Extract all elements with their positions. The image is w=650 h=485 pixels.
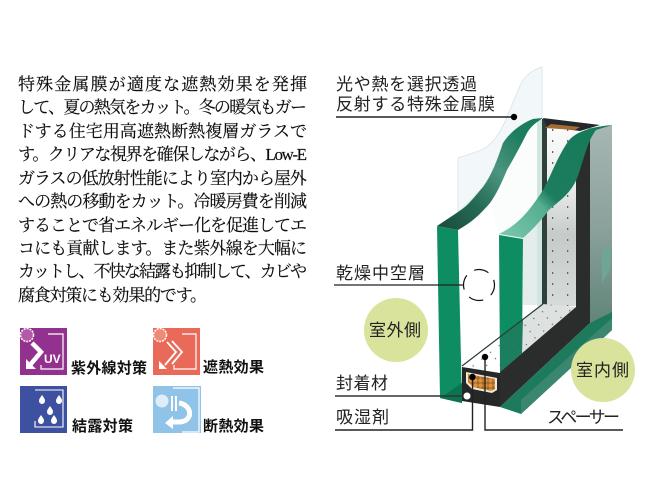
label: special metal film <box>336 75 495 114</box>
label: heat shielding: 遮熱効果 <box>203 358 264 376</box>
label: desiccant: 吸湿剤 <box>336 408 389 427</box>
pointer: desiccant <box>335 374 476 430</box>
pointer: special metal film <box>336 114 517 120</box>
dotted spacer face <box>547 128 576 306</box>
floor seen through inner pane <box>500 320 523 372</box>
icon: thermal insulation <box>153 386 201 433</box>
badge: outdoor side: 室外側 <box>369 321 421 340</box>
body text: コにも貢献します。また紫外線を大幅に <box>18 239 307 258</box>
body text: カットし、不快な結露も抑制して、カビや <box>18 261 307 281</box>
icon: UV protection: UV <box>44 352 61 366</box>
body text: 特殊金属膜が適度な遮熱効果を発揮 <box>18 75 307 94</box>
outer pane front <box>437 226 462 403</box>
badge: outdoor side <box>364 298 428 362</box>
label: UV protection: 紫外線対策 <box>71 359 147 377</box>
right side panel <box>590 125 612 330</box>
upper thin glass sheet <box>458 67 542 212</box>
body text: す。クリアな視界を確保しながら、Low-E <box>18 145 307 164</box>
label: thermal insulation: 断熱効果 <box>203 417 264 435</box>
glass diagram <box>437 67 612 414</box>
body text: ドする住宅用高遮熱断熱複層ガラスで <box>18 122 307 141</box>
body text: することで省エネルギー化を促進してエ <box>18 216 307 235</box>
inner pane curved top <box>499 125 612 238</box>
body text: への熱の移動をカット。冷暖房費を削減 <box>18 192 307 211</box>
spacer front <box>462 367 500 407</box>
body text: して、夏の熱気をカット。冬の暖気もガー <box>18 98 307 117</box>
badge: indoor side: 室内側 <box>576 361 629 380</box>
body text: ガラスの低放射性能により室内から屋外 <box>18 169 307 188</box>
desiccant <box>466 372 497 393</box>
pointer: spacer <box>482 354 623 430</box>
label: sealant: 封着材 <box>336 374 388 393</box>
outer pane curved top <box>437 118 543 230</box>
body text: 腐食対策にも効果的です。 <box>18 286 207 305</box>
label: spacer: スペーサー <box>547 408 620 427</box>
floor edge line <box>462 304 543 366</box>
icon: heat shielding <box>153 328 200 375</box>
inner pale glass between panes <box>523 215 537 305</box>
inner pane front <box>499 235 523 372</box>
top dark wedge <box>543 118 600 131</box>
body text <box>18 75 307 305</box>
black band <box>500 128 590 407</box>
badge: indoor side <box>571 338 635 402</box>
icon: condensation control <box>20 386 67 433</box>
top desiccant strip <box>545 124 580 130</box>
label: condensation control: 結露対策 <box>72 417 133 435</box>
label: dry air layer: 乾燥中空層 <box>336 264 425 283</box>
bottom green band <box>500 312 612 414</box>
label: special metal film: 反射する特殊金属膜 <box>336 95 495 114</box>
pointer: dry air layer <box>334 270 494 300</box>
label: special metal film: 光や熱を選択透過 <box>336 75 477 94</box>
dotted floor <box>462 338 500 372</box>
icon: UV protection <box>20 328 67 375</box>
pointer: sealant <box>335 392 470 400</box>
outer pane foot <box>440 383 462 403</box>
inner vertical edge of outer pane <box>537 120 542 306</box>
dark spacer strip <box>542 119 547 306</box>
